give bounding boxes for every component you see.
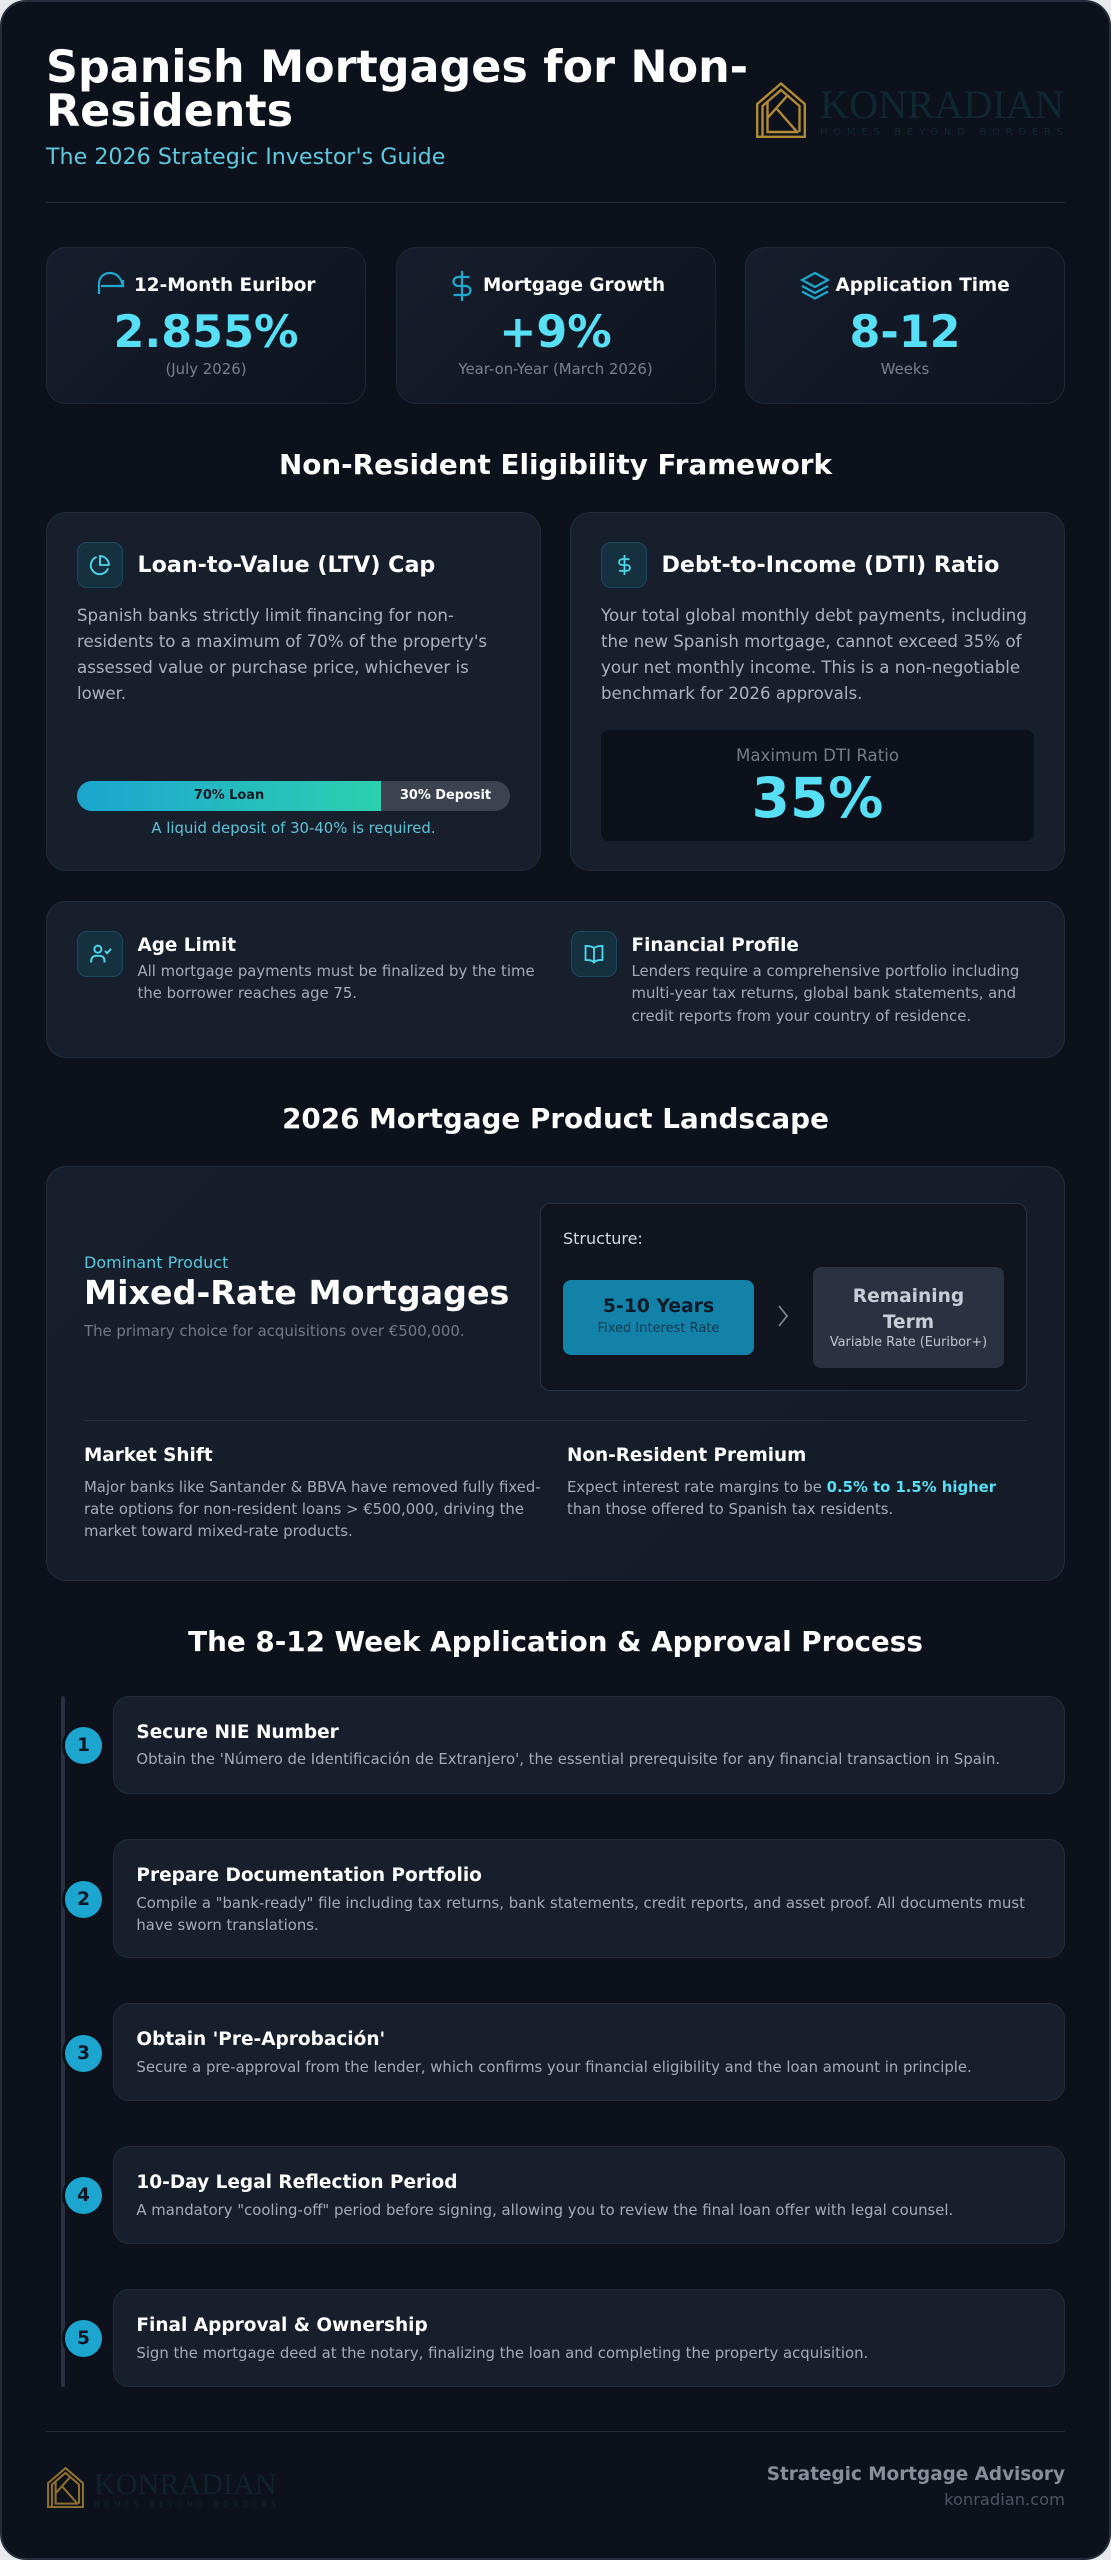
fixed phase	[563, 1280, 754, 1355]
step card	[113, 2146, 1065, 2244]
text: rate options for non-resident loans > €500,000, driving the	[84, 1500, 524, 1518]
icon: user check	[77, 931, 123, 977]
logo wordmark: KONRADIAN	[94, 2468, 277, 2501]
icon: dollar	[452, 271, 472, 301]
logo: Konradian	[756, 82, 1069, 138]
timeline rail	[61, 1696, 65, 2387]
panel: age and financial profile	[46, 901, 1065, 1058]
icon: dollar	[601, 542, 647, 588]
step 4	[62, 2146, 1065, 2244]
header	[46, 42, 1069, 170]
structure label: Structure:	[563, 1229, 643, 1248]
callout label: Maximum DTI Ratio	[736, 746, 899, 765]
step 3	[62, 2003, 1065, 2101]
panel body: Spanish banks strictly limit financing for non-	[77, 606, 454, 625]
callout value: 35%	[752, 766, 883, 830]
phase title: 5-10 Years	[603, 1296, 714, 1317]
stat value: 2.855%	[114, 307, 298, 358]
stat note: Year-on-Year (March 2026)	[458, 360, 653, 378]
step text: have sworn translations.	[136, 1916, 319, 1934]
title: Spanish Mortgages for Non-	[46, 42, 748, 93]
item body: credit reports from your country of residence.	[632, 1007, 971, 1025]
step title: Obtain 'Pre-Aprobación'	[136, 2029, 385, 2050]
subheading: Non-Resident Premium	[567, 1445, 806, 1466]
step number	[65, 2320, 102, 2356]
step text: Secure a pre-approval from the lender, which confirms your financial eligibility and the loan amount in principle.	[136, 2058, 972, 2076]
LTV bar	[77, 781, 510, 811]
stat value: +9%	[499, 307, 612, 358]
icon: house logo	[756, 82, 806, 138]
footer	[47, 2464, 1065, 2509]
item title: Financial Profile	[632, 935, 799, 956]
stat card: Application time	[745, 247, 1065, 404]
footer logo	[47, 2467, 280, 2509]
logo wordmark: KONRADIAN	[820, 82, 1064, 127]
panel body: your net monthly income. This is a non-negotiable	[601, 658, 1020, 677]
panel body: lower.	[77, 684, 126, 703]
step card	[113, 1696, 1065, 1794]
subheading: Market Shift	[84, 1445, 213, 1466]
panel title: Debt-to-Income (DTI) Ratio	[662, 552, 999, 578]
icon: open book	[571, 931, 617, 977]
text: market toward mixed-rate products.	[84, 1522, 353, 1540]
step number: 2	[77, 1889, 90, 1910]
step text: Sign the mortgage deed at the notary, finalizing the loan and completing the property acquisition.	[136, 2344, 868, 2362]
item body	[138, 962, 535, 1002]
panel body	[601, 606, 1027, 703]
eyebrow: Dominant Product	[84, 1253, 228, 1272]
stat label: Application Time	[836, 275, 1010, 296]
stat label: 12-Month Euribor	[134, 275, 315, 296]
step text: A mandatory "cooling-off" period before signing, allowing you to review the final loan offer with legal counsel.	[136, 2201, 953, 2219]
panel: LTV cap	[46, 512, 541, 871]
step text: Obtain the 'Número de Identificación de Extranjero', the essential prerequisite for any financial transaction in Spain.	[136, 1750, 1000, 1768]
step title: 10-Day Legal Reflection Period	[136, 2172, 457, 2193]
loan segment	[77, 781, 381, 811]
phase title: Term	[883, 1312, 934, 1333]
item body	[632, 962, 1019, 1025]
phase note: Fixed Interest Rate	[598, 1321, 719, 1336]
loan segment: 70% Loan	[194, 788, 264, 803]
item body: multi-year tax returns, global bank statements, and	[632, 984, 1016, 1002]
step number: 5	[77, 2328, 90, 2348]
panel: DTI ratio	[570, 512, 1065, 871]
process timeline	[61, 1696, 65, 2387]
item body: Lenders require a comprehensive portfolio including	[632, 962, 1019, 980]
icon: layers	[800, 272, 830, 300]
step text: Compile a "bank-ready" file including tax returns, bank statements, credit reports, and asset proof. All documents must	[136, 1894, 1025, 1912]
logo tagline: HOMES BEYOND BORDERS	[820, 127, 1069, 138]
website: konradian.com	[944, 2490, 1065, 2509]
logo tagline: HOMES BEYOND BORDERS	[94, 2500, 280, 2509]
product note: The primary choice for acquisitions over €500,000.	[84, 1322, 465, 1340]
step text	[136, 1894, 1025, 1934]
step number: 3	[77, 2042, 90, 2064]
step 5	[62, 2289, 1065, 2387]
item body: All mortgage payments must be finalized by the time	[138, 962, 535, 980]
title	[46, 42, 748, 137]
step title: Secure NIE Number	[136, 1722, 339, 1743]
phase title: Remaining	[853, 1286, 964, 1307]
stat note: Weeks	[881, 360, 929, 378]
step title: Prepare Documentation Portfolio	[136, 1865, 482, 1886]
panel body	[77, 606, 487, 703]
step number: 4	[77, 2184, 90, 2206]
deposit segment: 30% Deposit	[400, 788, 491, 803]
text	[84, 1478, 541, 1540]
text: than those offered to Spanish tax residents.	[567, 1500, 893, 1518]
stat label: Mortgage Growth	[483, 275, 665, 296]
step number	[65, 2176, 102, 2214]
icon: pie chart	[77, 542, 123, 588]
phase title	[853, 1286, 964, 1333]
text	[567, 1478, 996, 1518]
stat card: Euribor	[46, 247, 366, 404]
product name: Mixed-Rate Mortgages	[84, 1273, 509, 1312]
text: Major banks like Santander & BBVA have removed fully fixed-	[84, 1478, 541, 1496]
step number	[65, 2034, 102, 2072]
panel body: Your total global monthly debt payments, including	[601, 606, 1027, 625]
heading: process: The 8-12 Week Application & Approval Process	[188, 1625, 923, 1658]
panel: mixed-rate mortgages	[46, 1166, 1065, 1581]
panel body: assessed value or purchase price, whichever is	[77, 658, 469, 677]
text: Expect interest rate margins to be 0.5% to 1.5% higher	[567, 1478, 996, 1496]
step number	[65, 1727, 102, 1764]
title: Residents	[46, 86, 293, 137]
subtitle: The 2026 Strategic Investor's Guide	[46, 144, 445, 170]
structure diagram	[540, 1203, 1027, 1391]
LTV caption: A liquid deposit of 30-40% is required.	[151, 819, 436, 837]
item title: Age Limit	[138, 935, 236, 956]
panel body: the new Spanish mortgage, cannot exceed 35% of	[601, 632, 1022, 651]
arrow	[778, 1306, 788, 1326]
stat note: (July 2026)	[165, 360, 247, 378]
stat value: 8-12	[849, 307, 961, 358]
icon: house logo	[47, 2467, 84, 2508]
variable phase	[813, 1267, 1004, 1368]
heading: product landscape: 2026 Mortgage Product Landscape	[282, 1102, 829, 1135]
panel body: residents to a maximum of 70% of the property's	[77, 632, 487, 651]
step 1	[62, 1696, 1065, 1794]
heading: eligibility: Non-Resident Eligibility Framework	[279, 448, 832, 481]
step 2	[62, 1839, 1065, 1958]
panel title: Loan-to-Value (LTV) Cap	[138, 552, 435, 578]
step number	[65, 1881, 102, 1918]
icon: rate arc	[98, 272, 124, 294]
panel body: benchmark for 2026 approvals.	[601, 684, 862, 703]
step card	[113, 2289, 1065, 2387]
market shift	[84, 1445, 541, 1540]
stat card: Mortgage growth	[396, 247, 716, 404]
step card	[113, 2003, 1065, 2101]
item body: the borrower reaches age 75.	[138, 984, 357, 1002]
step title: Final Approval & Ownership	[136, 2315, 428, 2336]
DTI callout	[601, 730, 1034, 841]
phase note: Variable Rate (Euribor+)	[830, 1335, 987, 1350]
advisory name: Strategic Mortgage Advisory	[767, 2464, 1065, 2485]
non-resident premium	[567, 1445, 996, 1518]
step number: 1	[77, 1735, 90, 1756]
step card	[113, 1839, 1065, 1958]
